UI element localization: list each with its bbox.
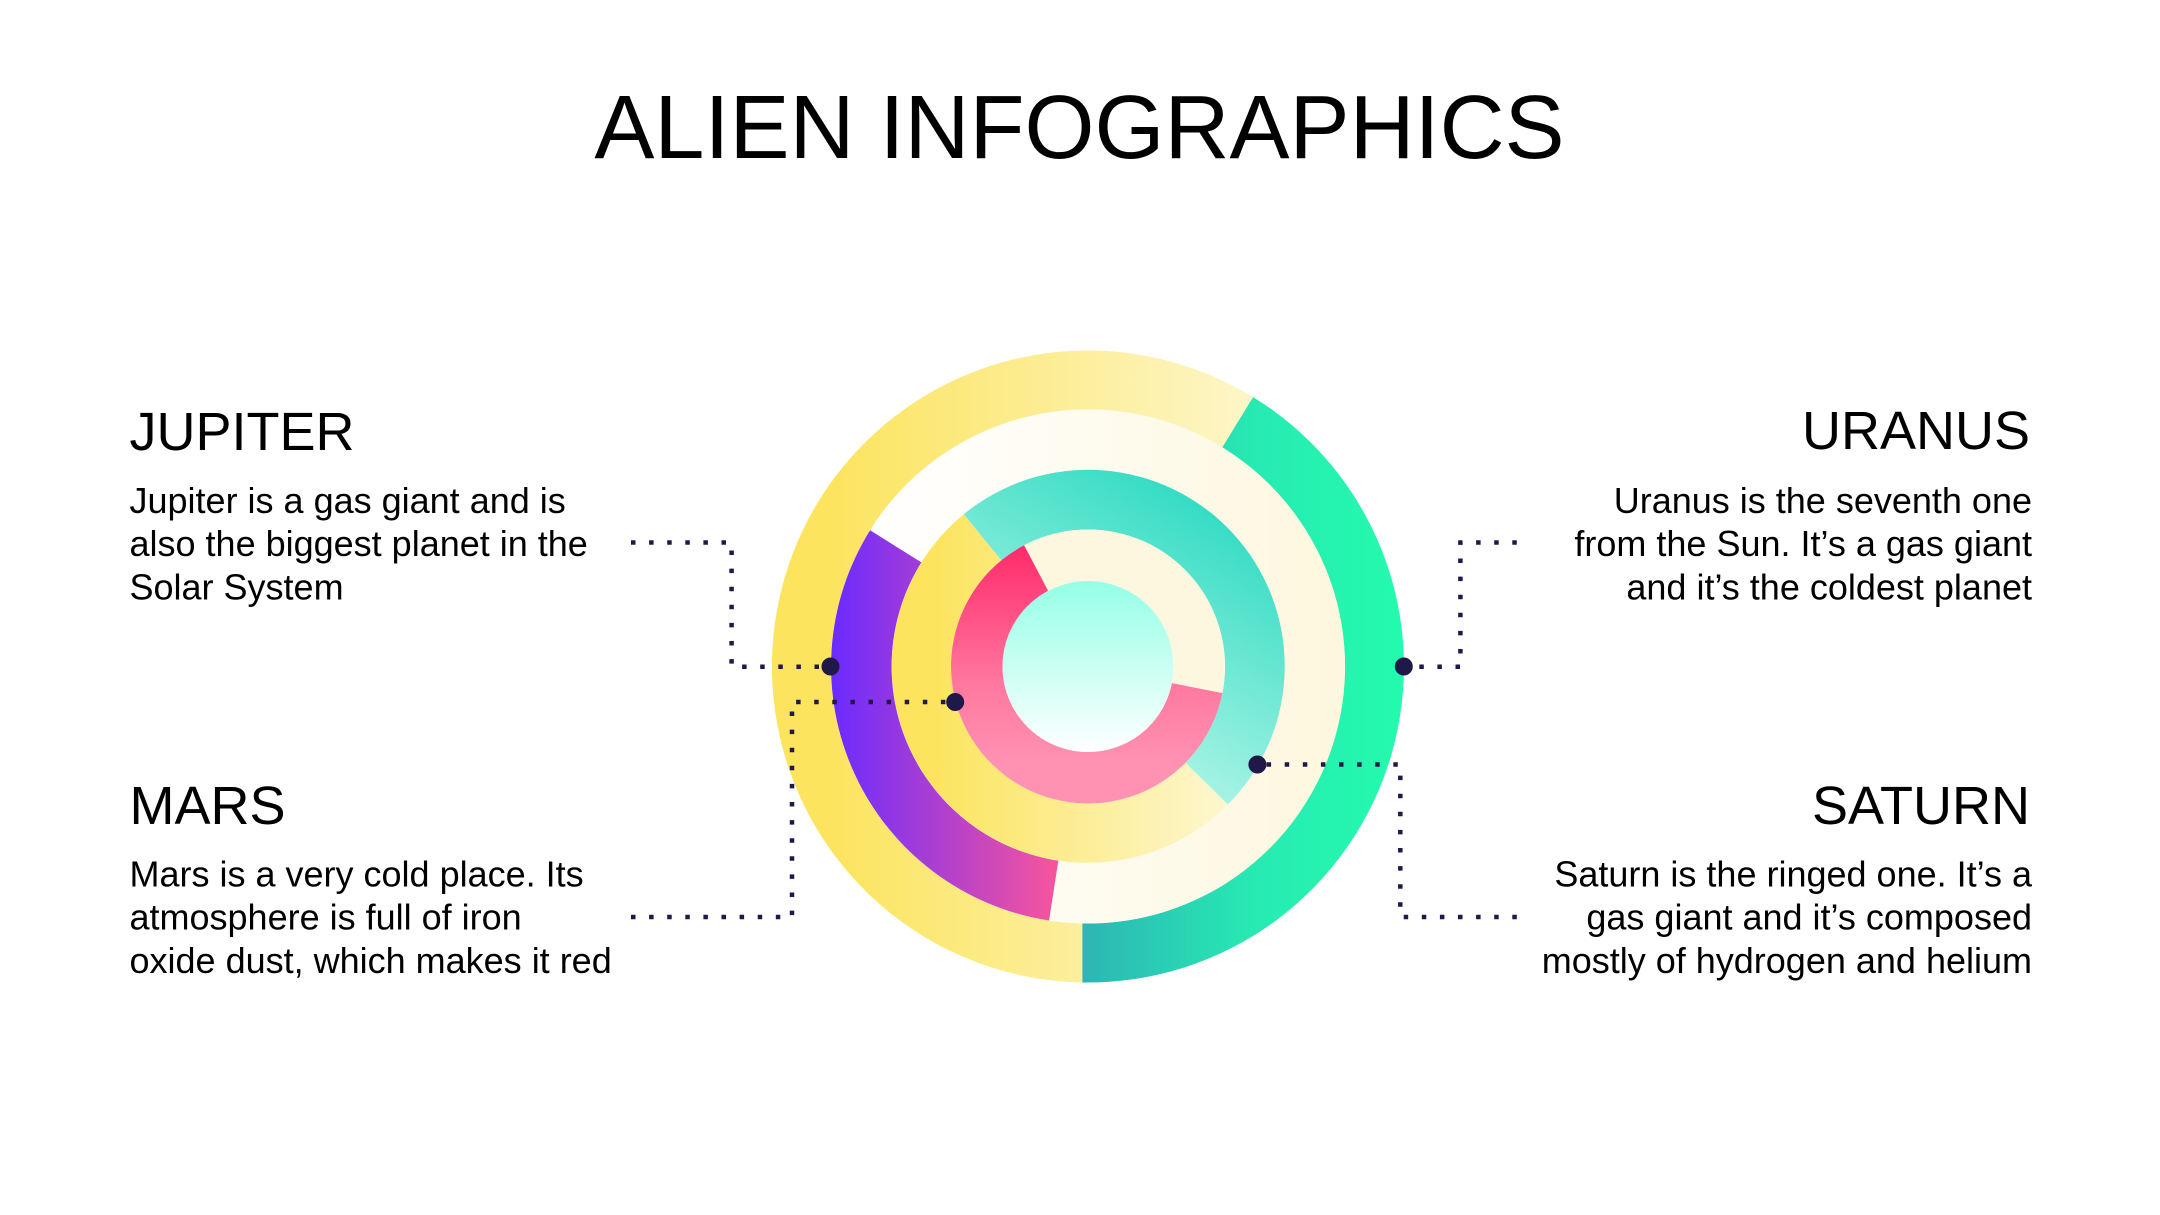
marker dot (822, 658, 840, 676)
third ring: yellow segment (892, 514, 1228, 863)
description: gas giant and it’s composed (1586, 897, 2032, 938)
description: from the Sun. It’s a gas giant (1574, 523, 2032, 564)
title: ALIEN INFOGRAPHICS (594, 78, 1565, 178)
dotted line (631, 702, 955, 917)
connector: Uranus (1395, 542, 1517, 676)
outer ring: yellow segment (772, 350, 1253, 982)
heading: JUPITER (130, 402, 355, 462)
description: mostly of hydrogen and helium (1542, 940, 2032, 981)
description: Saturn is the ringed one. It’s a (1554, 854, 2033, 894)
connector: Saturn (1248, 756, 1517, 917)
dotted line (1257, 764, 1517, 917)
panel: Mars (130, 776, 612, 981)
fourth ring: pink segment (951, 545, 1222, 803)
dotted line (631, 542, 830, 667)
heading: MARS (130, 776, 286, 836)
connector: Jupiter (631, 542, 840, 676)
heading: SATURN (1812, 776, 2030, 836)
outer ring: green segment (1082, 397, 1404, 982)
second ring: purple segment (831, 530, 1058, 920)
marker dot (1395, 658, 1413, 676)
third ring: teal segment (964, 470, 1285, 804)
connector: Mars (631, 693, 964, 917)
dotted line (1404, 542, 1517, 667)
second ring: cream segment (870, 409, 1345, 923)
panel: Saturn (1542, 776, 2033, 981)
description: oxide dust, which makes it red (130, 940, 612, 981)
description: also the biggest planet in the (130, 523, 588, 564)
marker dot (1248, 756, 1266, 774)
description: Uranus is the seventh one (1614, 480, 2032, 521)
heading: URANUS (1802, 401, 2030, 461)
description: atmosphere is full of iron (130, 897, 522, 938)
concentric ring chart (772, 350, 1404, 982)
panel: Uranus (1574, 401, 2032, 608)
description: Mars is a very cold place. Its (130, 854, 584, 894)
fourth ring: cream segment (1024, 529, 1225, 693)
description: Jupiter is a gas giant and is (130, 480, 566, 521)
description: and it’s the coldest planet (1626, 566, 2032, 608)
centre circle (1002, 581, 1174, 752)
panel: Jupiter (130, 402, 588, 608)
marker dot (946, 693, 964, 711)
description: Solar System (130, 566, 344, 608)
